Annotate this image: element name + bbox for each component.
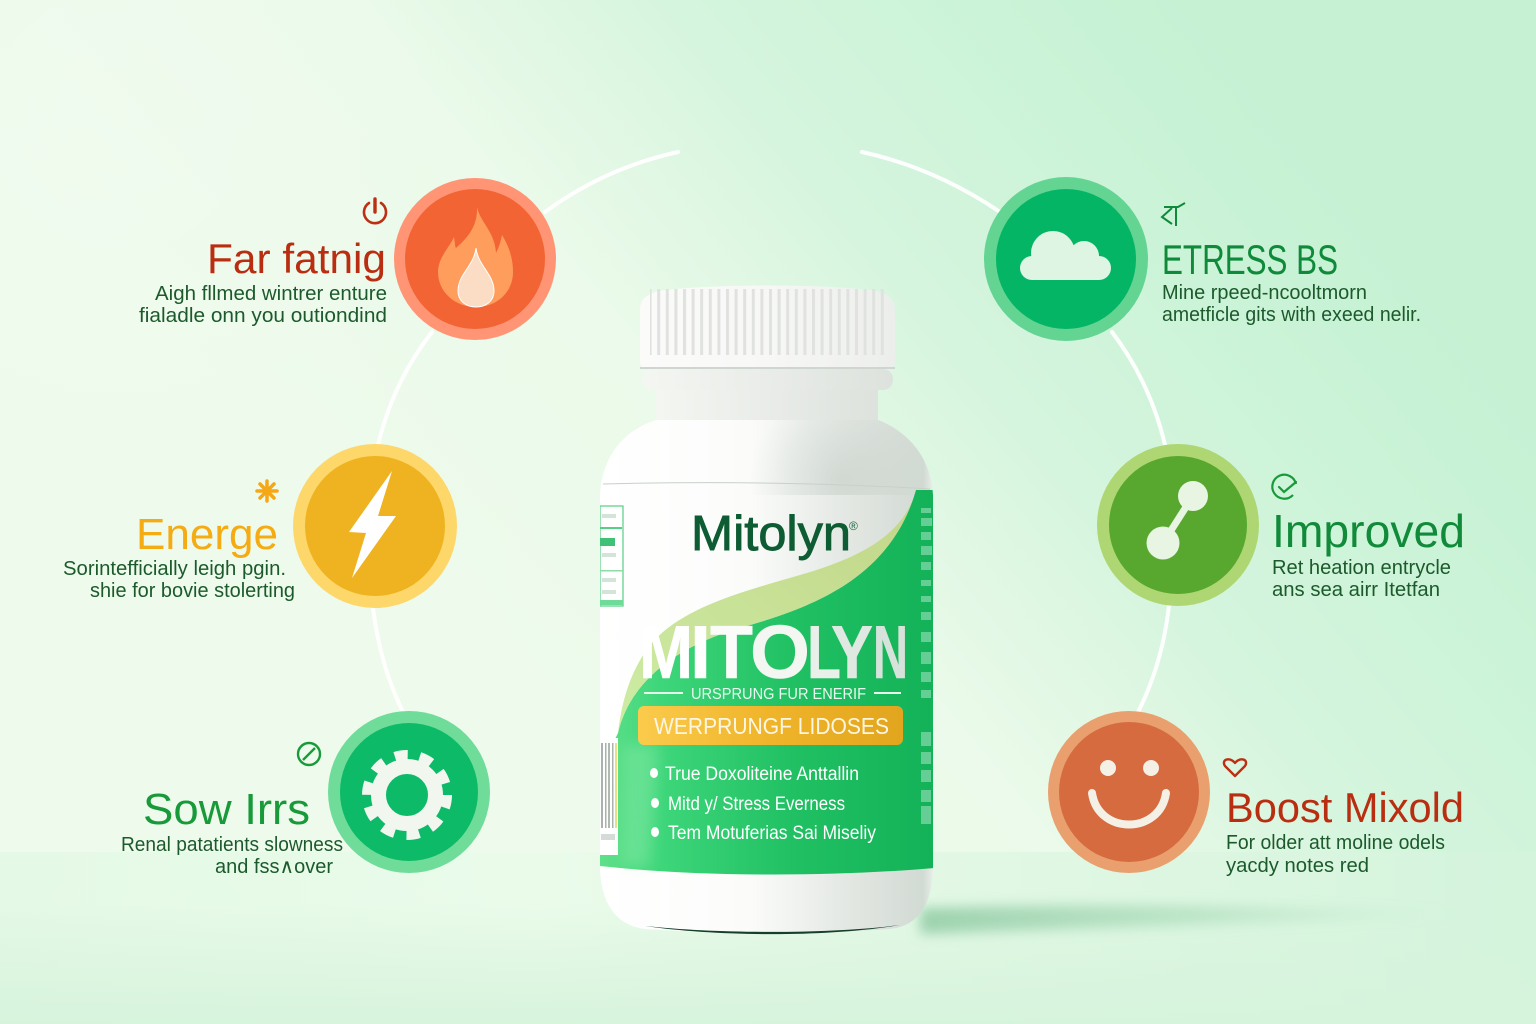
bottle neck — [656, 385, 878, 435]
neck ring — [642, 369, 893, 390]
label — [598, 490, 934, 875]
description — [1162, 282, 1421, 326]
benefit: fat burning — [139, 178, 556, 340]
large brand name: Y — [831, 610, 873, 694]
benefit: improved — [1097, 444, 1465, 606]
description: Sorintefficially leigh pgin. — [63, 558, 286, 580]
benefit: slow — [121, 711, 490, 878]
shoulder shading — [600, 420, 933, 495]
label bullet list: Tem Motuferias Sai Miseliy — [668, 823, 876, 844]
icon: flame badge — [394, 178, 556, 340]
green glare — [622, 745, 660, 866]
product bottle — [598, 286, 934, 934]
large brand name: O — [750, 610, 810, 694]
description — [1226, 832, 1445, 877]
description: Ret heation entrycle — [1272, 557, 1451, 579]
description — [1272, 557, 1451, 601]
description: fialadle onn you outiondind — [139, 305, 387, 327]
description: Mine rpeed-ncooltmorn — [1162, 282, 1367, 304]
icon: gear badge — [328, 711, 490, 873]
label lime wave — [618, 490, 916, 733]
label bullet list: Mitd y/ Stress Everness — [668, 794, 845, 815]
icon: power — [364, 199, 386, 223]
description: Aigh fllmed wintrer enture — [155, 283, 387, 305]
description: ametficle gits with exeed nelir. — [1162, 304, 1421, 326]
label bullet list — [650, 764, 876, 844]
label green field — [600, 490, 934, 875]
icon: smile badge — [1048, 711, 1210, 873]
left nutrition panel — [600, 506, 623, 606]
description: and fss∧over — [215, 856, 333, 878]
connecting arc: left — [373, 152, 678, 712]
right side small print — [921, 508, 932, 824]
label subtitle: URSPRUNG FUR ENERIF — [691, 686, 866, 703]
orange banner — [638, 706, 903, 745]
icon: check — [1272, 475, 1296, 499]
benefit: energy — [63, 444, 457, 608]
barcode panel — [598, 738, 618, 855]
bottle cap — [640, 286, 895, 369]
benefit: stress — [984, 177, 1421, 341]
connecting arc: right — [862, 152, 1169, 712]
label seam — [603, 483, 930, 489]
base contact line — [645, 925, 900, 934]
heading: Far fatnig — [207, 235, 386, 282]
icon: dumbbell badge — [1097, 444, 1259, 606]
large brand name: N — [873, 610, 908, 694]
icon: heart — [1224, 759, 1246, 776]
icon: star — [257, 481, 277, 501]
brand name: Mitolyn — [691, 507, 851, 561]
description: shie for bovie stolerting — [90, 580, 295, 602]
bottle body — [600, 420, 933, 933]
description: yacdy notes red — [1226, 855, 1369, 877]
icon: no sign — [298, 743, 320, 765]
description — [121, 834, 343, 878]
heading: Improved — [1272, 505, 1465, 557]
large brand name: L — [807, 610, 841, 694]
icon: small glyph — [1162, 203, 1185, 226]
benefit: mood — [1048, 711, 1464, 877]
large brand name: M — [639, 610, 693, 694]
description — [139, 283, 387, 327]
orange banner: WERPRUNGF LIDOSES — [654, 713, 889, 739]
heading: Boost Mixold — [1226, 784, 1464, 831]
description — [63, 558, 295, 602]
heading: Sow Irrs — [143, 785, 310, 834]
large brand name — [639, 610, 908, 694]
icon: lightning badge — [293, 444, 457, 608]
label bullet list: True Doxoliteine Anttallin — [665, 764, 859, 785]
large brand name: T — [710, 610, 753, 694]
icon: cloud badge — [984, 177, 1148, 341]
registered mark: ® — [849, 519, 858, 533]
description: For older att moline odels — [1226, 832, 1445, 854]
bottle shadow — [920, 905, 1470, 934]
heading: Energe — [136, 510, 278, 559]
heading: ETRESS BS — [1162, 236, 1338, 283]
large brand name: I — [690, 610, 711, 694]
description: ans sea airr Itetfan — [1272, 579, 1440, 601]
description: Renal patatients slowness — [121, 834, 343, 856]
